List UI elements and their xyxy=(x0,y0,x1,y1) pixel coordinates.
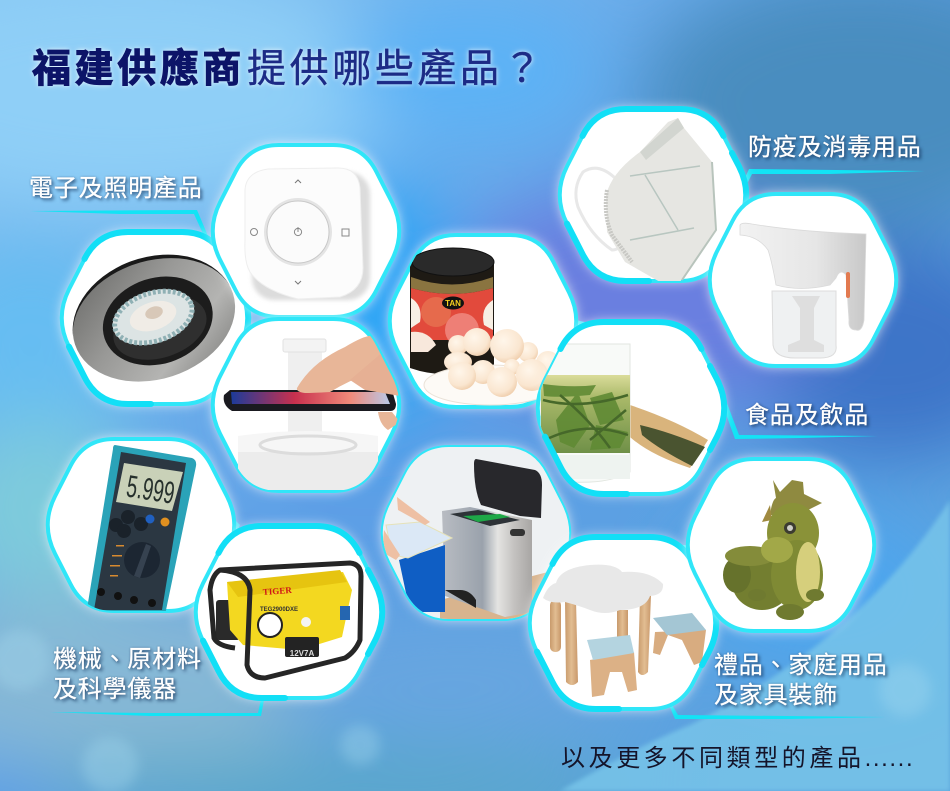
panel: waste bin xyxy=(380,445,575,625)
image: dragon xyxy=(723,480,824,620)
label: gifts and home xyxy=(714,652,890,710)
label: food and drink: 食品及飲品 xyxy=(745,402,869,429)
image: smart switch xyxy=(245,168,370,300)
image: can and lychees xyxy=(410,248,560,405)
panel: remote control xyxy=(213,145,399,317)
panel: downlight xyxy=(56,232,251,404)
generator model: TEG2900DXE xyxy=(260,607,298,613)
image: portable generator xyxy=(210,563,361,678)
can brand: TAN xyxy=(445,299,461,308)
leader line: epidemic products xyxy=(744,169,925,182)
image: recessed light xyxy=(72,254,236,382)
image: kids furniture xyxy=(543,565,706,697)
hexagon connectors xyxy=(205,240,745,625)
label: machinery: 及科學儀器 xyxy=(53,676,177,703)
panel: generator xyxy=(196,526,382,698)
leader line: machinery xyxy=(50,699,264,716)
label: epidemic prevention: 防疫及消毒用品 xyxy=(748,134,922,161)
leader line: gifts xyxy=(669,703,885,719)
label: machinery xyxy=(52,646,204,703)
panel: wireless charger xyxy=(213,319,400,491)
image: digital multimeter xyxy=(86,445,196,615)
panel: face mask xyxy=(560,109,746,282)
panel: dragon figurine xyxy=(688,459,874,631)
image: stainless bin xyxy=(380,445,575,625)
panel: green tea xyxy=(538,322,724,494)
panel: multimeter xyxy=(48,439,234,615)
meter reading: 5.999 xyxy=(124,470,177,511)
image: KN95 mask xyxy=(576,118,716,282)
label: machinery: 機械、原材料 xyxy=(53,646,202,673)
label: electronics: 電子及照明產品 xyxy=(29,175,203,202)
image: tea glass and scoop xyxy=(541,344,708,482)
title: 福建供應商提供哪些產品？ xyxy=(32,48,545,91)
footer note: 以及更多不同類型的產品...... xyxy=(561,745,914,772)
image: sprayer xyxy=(740,223,866,358)
panel: canned lychee xyxy=(390,235,576,407)
battery label: 12V7A xyxy=(290,649,314,658)
leader line: food xyxy=(718,390,878,439)
panel: table and stools xyxy=(530,537,716,709)
panel: disinfectant sprayer xyxy=(710,194,896,366)
image: phone on charger xyxy=(224,336,400,490)
label: gifts and home: 及家具裝飾 xyxy=(714,682,838,709)
generator brand: TIGER xyxy=(262,585,293,597)
leader line: electronics xyxy=(30,210,208,236)
label: gifts and home: 禮品、家庭用品 xyxy=(714,652,888,679)
